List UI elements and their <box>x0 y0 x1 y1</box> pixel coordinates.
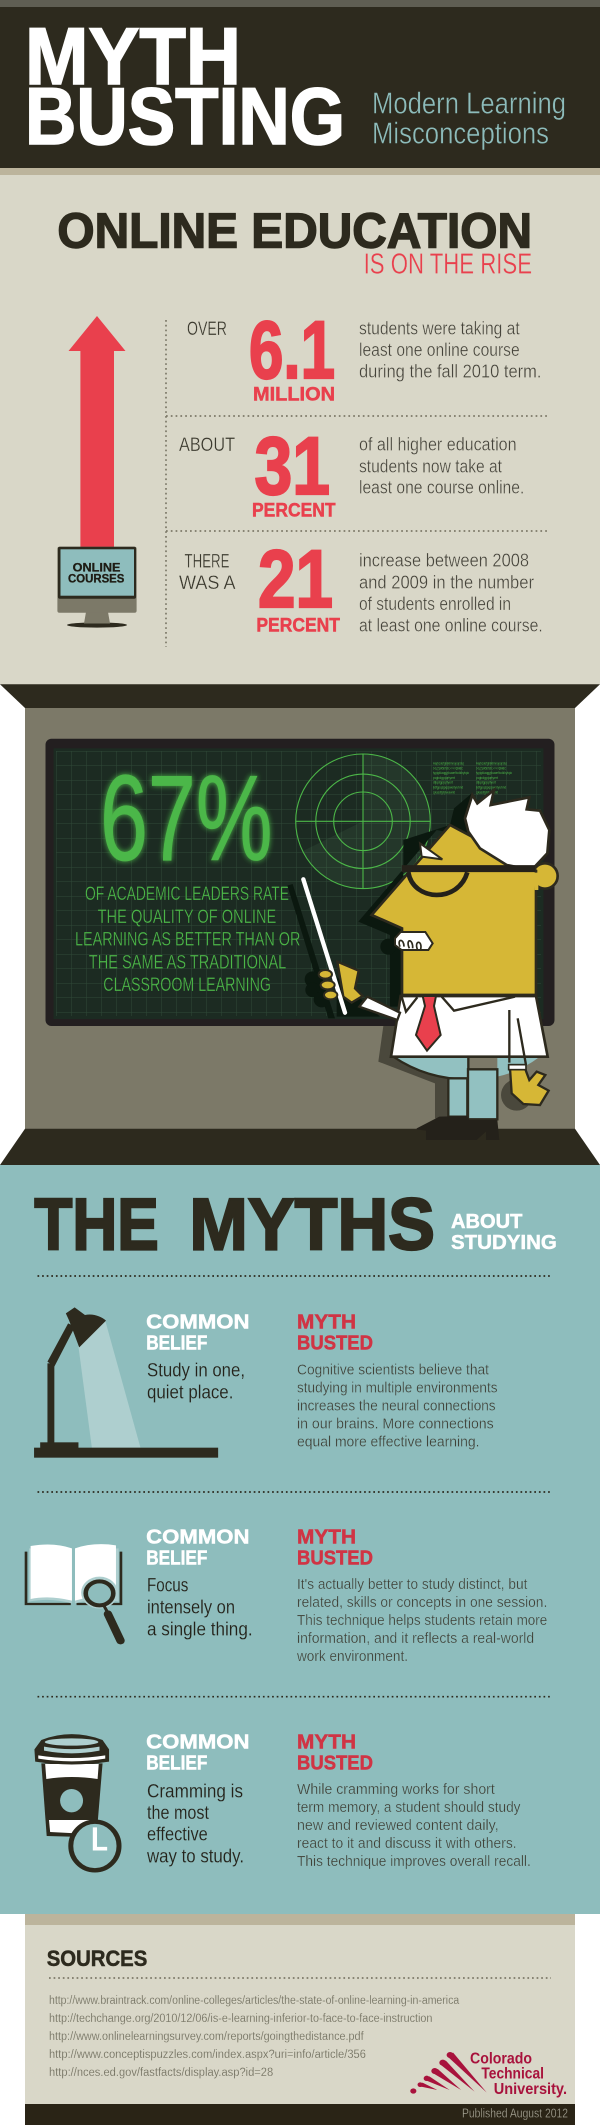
stat: 21 percent: of students enrolled in <box>359 593 511 614</box>
icon: desk lamp <box>34 1307 218 1458</box>
panel: the myths <box>0 1165 600 1914</box>
common belief: the most <box>147 1803 210 1824</box>
stat: 6.1 million: MILLION <box>253 384 335 406</box>
icon: book and magnifier <box>26 1544 121 1641</box>
myth busted: information, and it reflects a real-world <box>297 1630 534 1647</box>
stat: 31 percent: least one course online. <box>359 477 524 498</box>
icon: monitor with online courses: ONLINE <box>73 561 120 575</box>
heading: the myths: THE <box>34 1184 159 1265</box>
common belief: effective <box>147 1825 208 1846</box>
common belief: Focus <box>147 1576 188 1597</box>
body shadow on wall <box>378 1026 453 1118</box>
myth busted: in our brains. More connections <box>297 1415 494 1432</box>
source links: http://www.conceptispuzzles.com/index.aspx?uri=info/article/356 <box>49 2049 366 2061</box>
tiny board code: Ljkasdfghjhwuiwrld <box>476 790 498 794</box>
mustache <box>395 932 433 950</box>
stat: 31 percent: 31 <box>254 421 330 512</box>
common belief <box>146 1310 250 1403</box>
common belief: Cramming is <box>147 1781 243 1802</box>
character: professor <box>303 790 558 1140</box>
stat: 21 percent <box>179 534 543 637</box>
myth busted: new and reviewed content daily, <box>297 1817 499 1834</box>
tiny board code <box>433 762 512 794</box>
head <box>372 825 536 995</box>
common belief: a single thing. <box>147 1620 253 1641</box>
source links: http://www.braintrack.com/online-colleges/articles/the-state-of-online-learning-in-america <box>49 1995 460 2007</box>
myth busted: related, skills or concepts in one session. <box>297 1594 547 1611</box>
myth busted: term memory, a student should study <box>297 1799 521 1816</box>
myth busted: MYTH <box>297 1525 356 1548</box>
myth busted: While cramming works for short <box>297 1781 496 1798</box>
tiny board code: 0-1(2)3456789:;<=>?@ABC <box>433 766 463 770</box>
left sleeve <box>359 997 400 1020</box>
myth busted: equal more effective learning. <box>297 1433 480 1450</box>
title: MYTH <box>25 12 241 102</box>
stat: 6.1 million: least one online course <box>359 339 520 360</box>
subtitle: Modern Learning <box>372 85 566 120</box>
right hand <box>510 1068 549 1105</box>
source links <box>49 1995 460 2079</box>
myth busted: studying in multiple environments <box>297 1379 498 1396</box>
footer bar: Published August 2012 <box>462 2106 568 2121</box>
glasses <box>402 869 535 895</box>
heading: the myths <box>34 1184 435 1265</box>
stat: 31 percent: PERCENT <box>252 500 336 522</box>
board text: CLASSROOM LEARNING <box>103 974 271 996</box>
common belief: BELIEF <box>146 1331 207 1354</box>
stat: 31 percent <box>179 421 524 522</box>
header banner <box>0 0 600 175</box>
source links: http://www.onlinelearningsurvey.com/reports/goingthedistance.pdf <box>49 2031 364 2043</box>
tiny board code: lypjqkIaqgyjkuwe9cdkIrylqio <box>433 771 469 775</box>
tiny board code: lypjqkIaqgyjkuwe9cdkIrylqio <box>476 771 512 775</box>
subheading: about studying <box>451 1210 557 1254</box>
title <box>25 12 345 162</box>
panel: online education <box>0 175 600 684</box>
stat: 6.1 million: students were taking at <box>359 317 520 338</box>
source links: http://nces.ed.gov/fastfacts/display.asp?id=28 <box>49 2067 273 2079</box>
board text: THE QUALITY OF ONLINE <box>98 906 276 928</box>
radar <box>296 754 430 889</box>
heading: the myths: MYTHS <box>189 1184 435 1265</box>
character shadow on board <box>287 793 472 1018</box>
tiny board code: Ljkasdfghjhwuiwrld <box>433 790 455 794</box>
common belief: COMMON <box>146 1310 250 1333</box>
myth busted: BUSTED <box>297 1546 373 1569</box>
stat: 31 percent: ABOUT <box>179 435 235 456</box>
hand shadow on wall <box>501 1079 532 1111</box>
footer bar <box>25 2104 575 2125</box>
left palm <box>337 962 363 1003</box>
panel: classroom scene <box>0 684 600 1165</box>
stat: 21 percent: PERCENT <box>256 615 340 637</box>
stat: 21 percent: 21 <box>258 534 333 625</box>
logo: colorado technical university: University. <box>494 2081 567 2098</box>
myth busted: BUSTED <box>297 1331 373 1354</box>
common belief: quiet place. <box>147 1382 233 1403</box>
myth busted: BUSTED <box>297 1751 373 1774</box>
fingers <box>319 970 337 999</box>
common belief <box>146 1525 253 1641</box>
eyebrow <box>420 843 442 859</box>
arrow: rising courses <box>68 316 126 547</box>
stat: 6.1 million: during the fall 2010 term. <box>359 360 542 381</box>
subheading: is on the rise: IS ON THE RISE <box>364 248 532 280</box>
blackboard <box>46 739 554 1026</box>
logo: colorado technical university <box>410 2050 567 2098</box>
board text: OF ACADEMIC LEADERS RATE <box>85 883 289 905</box>
panel: sources <box>25 1914 575 2125</box>
myth busted <box>297 1310 498 1450</box>
tiny board code: dljqdgpjqrtyert <box>476 781 496 785</box>
common belief: BELIEF <box>146 1546 207 1569</box>
board text: THE SAME AS TRADITIONAL <box>89 951 286 973</box>
tiny board code: dljqdgpjqrtyert <box>433 781 453 785</box>
stat: 6.1 million: OVER <box>187 319 227 340</box>
stat: 21 percent: at least one online course. <box>359 615 543 636</box>
pants <box>393 1057 540 1119</box>
common belief: COMMON <box>146 1525 250 1548</box>
right cuff <box>509 1065 526 1070</box>
hair <box>465 790 549 870</box>
common belief: intensely on <box>147 1597 235 1618</box>
myth 1 <box>34 1307 498 1458</box>
myth busted: Cognitive scientists believe that <box>297 1361 490 1378</box>
tiny board code: 0-1(2)3456789:;<=>?@ABC <box>476 766 506 770</box>
logo: colorado technical university: Colorado <box>470 2050 532 2067</box>
icon: monitor with online courses <box>57 547 137 628</box>
shirt <box>391 996 548 1057</box>
subtitle <box>372 85 566 150</box>
stat: 31 percent: students now take at <box>359 455 502 476</box>
tiny board code: ljdfgpqsjpqsjwertyuhnd <box>476 786 506 790</box>
myth busted: MYTH <box>297 1310 356 1333</box>
myth busted: It's actually better to study distinct, but <box>297 1576 528 1593</box>
myth 3 <box>34 1730 531 1870</box>
stat: 21 percent: THERE <box>184 552 230 573</box>
stat: 21 percent: WAS A <box>179 573 236 594</box>
shoes <box>417 1116 499 1140</box>
common belief: way to study. <box>146 1846 244 1867</box>
icon: monitor with online courses: COURSES <box>68 572 124 586</box>
subtitle: Misconceptions <box>372 115 549 150</box>
subheading: about studying: STUDYING <box>451 1231 557 1254</box>
myth busted: MYTH <box>297 1730 356 1753</box>
logo: colorado technical university: Technical <box>481 2065 544 2082</box>
common belief <box>146 1730 250 1867</box>
tiny board code: Aa(bcdefghijklmnopqrstu) <box>433 762 464 766</box>
myth busted: This technique helps students retain more <box>297 1612 547 1629</box>
myth busted <box>297 1730 531 1870</box>
heading: online education: ONLINE EDUCATION <box>57 203 532 258</box>
myth busted: react to it and discuss it with others. <box>297 1835 517 1852</box>
tiny board code: ljdfgpqsjpqsjwertyuhnd <box>433 786 463 790</box>
stat: 6.1 million <box>187 305 542 406</box>
common belief: Study in one, <box>147 1361 245 1382</box>
stat: 6.1 million: 6.1 <box>249 305 335 396</box>
board text <box>75 883 300 996</box>
title: BUSTING <box>25 72 345 162</box>
board text: LEARNING AS BETTER THAN OR <box>75 929 300 951</box>
stat: 21 percent: increase between 2008 <box>359 550 529 571</box>
myth busted <box>296 1525 547 1665</box>
myth busted: increases the neural connections <box>297 1397 496 1414</box>
common belief: COMMON <box>146 1730 250 1753</box>
common belief: BELIEF <box>146 1751 207 1774</box>
myth busted: This technique improves overall recall. <box>297 1853 531 1870</box>
stat: 31 percent: of all higher education <box>359 434 517 455</box>
tie <box>416 996 441 1051</box>
collar and arm lines <box>402 997 526 1065</box>
tiny board code: pqlpdgpjqrtyert <box>476 776 498 780</box>
subheading: about studying: ABOUT <box>451 1210 523 1233</box>
icon: coffee cup and clock <box>34 1734 119 1870</box>
room walls and floor <box>0 684 600 1165</box>
source links: http://techchange.org/2010/12/06/is-e-learning-inferior-to-face-to-face-instruction <box>49 2013 432 2025</box>
tiny board code: pqlpdgpjqrtyert <box>433 776 455 780</box>
myth 2 <box>26 1525 547 1665</box>
ear <box>532 863 558 889</box>
myth busted: work environment. <box>296 1648 408 1665</box>
heading: sources: SOURCES <box>47 1946 147 1971</box>
stat: 21 percent: and 2009 in the number <box>359 571 534 592</box>
tiny board code: Aa(bcdefghijklmnopqrstu) <box>476 762 507 766</box>
big stat: 67 percent: 67% <box>100 750 272 886</box>
pointer stick <box>303 879 345 1013</box>
